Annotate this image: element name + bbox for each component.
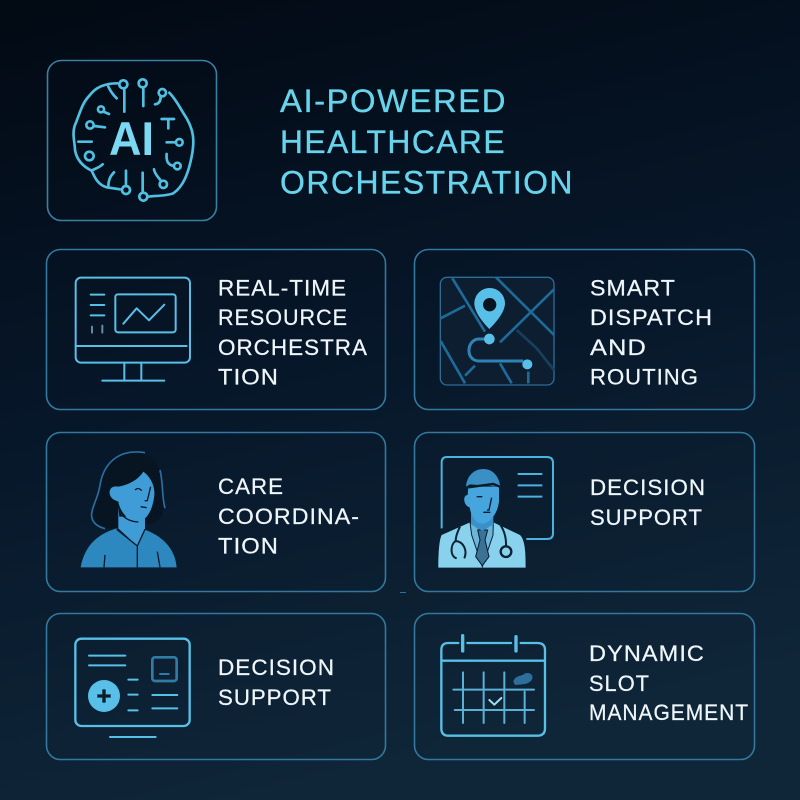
title: HEALTHCARE (280, 124, 506, 160)
text: DECISION (590, 475, 706, 500)
text: TION (218, 364, 279, 390)
text: RESOURCE (218, 305, 348, 330)
text: SUPPORT (590, 505, 703, 530)
text: DYNAMIC (589, 641, 705, 666)
panel: care coordination (46, 432, 386, 592)
text (590, 276, 713, 390)
panel: real-time resource orchestration (46, 250, 386, 410)
text: DISPATCH (590, 305, 713, 330)
text (218, 474, 360, 558)
text: DECISION (218, 655, 335, 680)
icon: medical record screen (75, 639, 190, 737)
title (280, 83, 574, 200)
panel: header logo (48, 60, 216, 220)
text: AND (590, 335, 647, 360)
text: ROUTING (590, 364, 699, 390)
text: SUPPORT (218, 685, 332, 710)
icon: woman portrait (81, 452, 177, 567)
text (590, 475, 706, 530)
icon: AI brain circuit (74, 79, 193, 201)
icon: monitor with chart (76, 278, 190, 381)
text: REAL-TIME (218, 276, 347, 300)
text: COORDINA- (218, 504, 360, 529)
text: ORCHESTRA (218, 335, 368, 360)
panel: decision support (doctor) (414, 432, 754, 592)
icon: map with pin and route (440, 277, 554, 385)
text (218, 276, 368, 390)
text: MANAGEMENT (589, 700, 749, 725)
icon: calendar (441, 636, 545, 736)
panel: smart dispatch and routing (414, 250, 754, 410)
text: SLOT (589, 671, 650, 696)
text: CARE (218, 474, 284, 499)
panel: dynamic slot management (414, 614, 754, 760)
text (218, 655, 335, 710)
panel: decision support (record) (46, 614, 386, 760)
icon: doctor with chart board (438, 457, 553, 568)
text (589, 641, 749, 725)
title: ORCHESTRATION (280, 164, 574, 200)
icon label: AI: AI (109, 112, 154, 165)
text: TION (218, 534, 279, 558)
text: SMART (590, 276, 676, 300)
title: AI-POWERED (280, 83, 507, 119)
